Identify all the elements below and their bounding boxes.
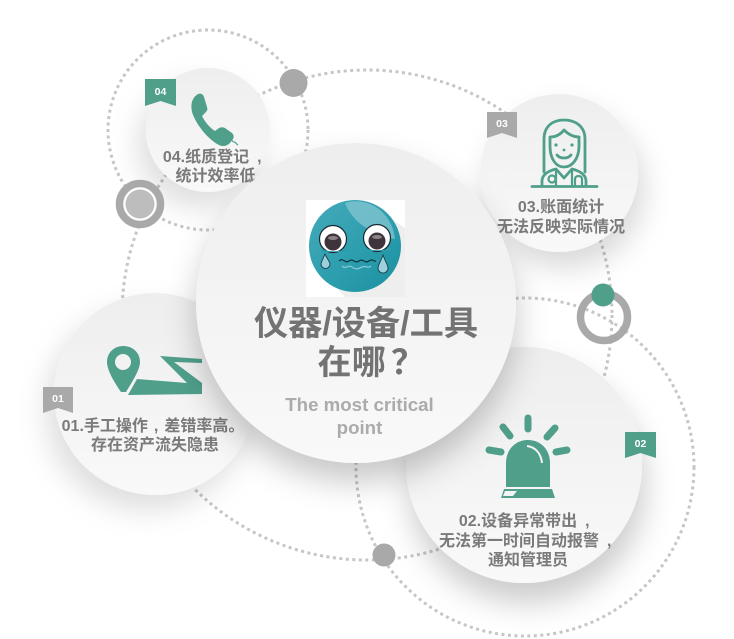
node: right ring with green dot bbox=[580, 284, 628, 340]
label: 04 text bbox=[163, 147, 262, 185]
node: top grey dot bbox=[280, 69, 308, 97]
subtitle bbox=[285, 394, 434, 438]
ribbon: 03: 03 bbox=[496, 118, 508, 130]
label: 04 text: 统计效率低 bbox=[175, 166, 256, 185]
label: 02 text bbox=[439, 511, 611, 569]
label: 03 text: 无法反映实际情况 bbox=[497, 217, 625, 236]
label: 01 text bbox=[62, 416, 244, 454]
title: 在哪？ bbox=[318, 344, 425, 382]
label: 01 text: 存在资产流失隐患 bbox=[91, 435, 219, 454]
label: 03 text bbox=[497, 197, 625, 236]
title bbox=[254, 305, 478, 382]
label: 02 text: 无法第一时间自动报警 , bbox=[439, 531, 611, 550]
ribbon: 03 bbox=[487, 112, 517, 138]
ribbon: 02: 02 bbox=[635, 438, 646, 450]
node: left ring bbox=[120, 184, 160, 224]
panel: 02 abnormal equipment bbox=[406, 347, 656, 583]
icon: alarm light bbox=[489, 418, 567, 498]
label: 01 text: 01.手工操作 , 差错率高。 bbox=[62, 416, 244, 435]
icon: doctor bbox=[532, 120, 597, 186]
subtitle: point bbox=[337, 417, 382, 438]
label: 04 text: 04.纸质登记 , bbox=[163, 147, 262, 166]
subtitle: The most critical bbox=[285, 394, 434, 415]
panel: 04 paper records bbox=[145, 68, 270, 192]
title: 仪器/设备/工具 bbox=[254, 305, 478, 343]
panel: 03 book statistics bbox=[480, 94, 638, 252]
dotted connector rings bbox=[108, 30, 694, 636]
ribbon: 02 bbox=[625, 432, 656, 458]
label: 03 text: 03.账面统计 bbox=[518, 197, 604, 216]
ribbon: 01 bbox=[43, 387, 73, 413]
icon: telephone handset bbox=[191, 94, 238, 146]
icon: crying face bbox=[306, 200, 405, 297]
ribbon: 04: 04 bbox=[155, 86, 166, 98]
node: bottom grey dot bbox=[372, 544, 396, 566]
label: 02 text: 02.设备异常带出 , bbox=[459, 511, 590, 530]
ribbon: 01: 01 bbox=[52, 393, 64, 405]
panel: central circle bbox=[196, 143, 516, 463]
label: 02 text: 通知管理员 bbox=[488, 550, 568, 569]
icon: map pin and route bbox=[107, 346, 202, 395]
panel: 01 manual operation bbox=[43, 293, 256, 495]
